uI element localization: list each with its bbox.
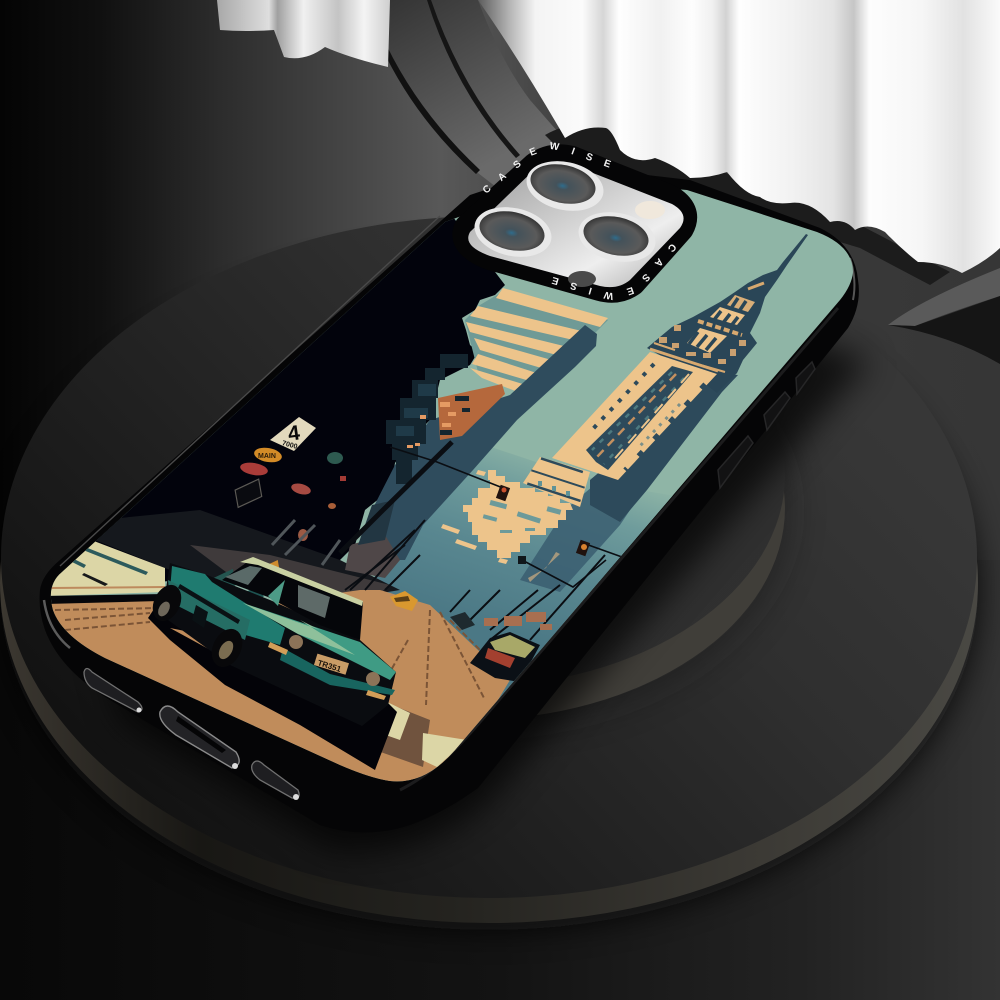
license plate: TR351 bbox=[317, 658, 343, 674]
phone shadow bbox=[100, 300, 870, 851]
mid blue pixel buildings bbox=[386, 354, 468, 484]
sky bbox=[40, 170, 870, 800]
large disc bbox=[0, 216, 978, 930]
road markings bbox=[55, 608, 510, 705]
curtain right bbox=[478, 0, 1000, 273]
dark blue building bbox=[372, 325, 597, 560]
left strip windows bbox=[590, 364, 654, 432]
road bbox=[52, 590, 510, 782]
right strip windows bbox=[625, 384, 705, 470]
dark city silhouette bbox=[40, 200, 505, 590]
camera island bbox=[456, 142, 698, 303]
license plate bbox=[314, 654, 349, 675]
sign 4: 4 bbox=[287, 421, 302, 446]
dark road band bbox=[95, 510, 400, 600]
right sidewalk patches bbox=[382, 702, 464, 767]
camera glass plate bbox=[468, 162, 684, 287]
left sidewalk bbox=[45, 538, 165, 605]
car rear body bbox=[157, 563, 396, 726]
curtain shadow scallops bbox=[545, 124, 950, 285]
tower central windows bbox=[586, 366, 693, 470]
sign 4: 7000 bbox=[281, 440, 298, 451]
tower crown details bbox=[687, 295, 755, 353]
taxi bbox=[390, 591, 418, 611]
small curtain left bbox=[217, 0, 390, 67]
car hood bbox=[243, 603, 396, 680]
right car bbox=[470, 632, 540, 682]
corner stand right bbox=[888, 268, 1000, 364]
car headlights bbox=[289, 635, 303, 649]
orange sign: MAIN bbox=[258, 453, 276, 460]
tower base bbox=[523, 457, 590, 507]
lower beige pixel blocks bbox=[441, 470, 573, 582]
screen artwork: pixel city bbox=[40, 170, 870, 800]
small disc bbox=[538, 492, 786, 714]
brand text: CASEWISE bbox=[552, 244, 676, 300]
traffic lights bbox=[496, 485, 590, 564]
car roof and cabin bbox=[222, 558, 363, 640]
green car bbox=[147, 557, 397, 770]
side buttons bbox=[718, 362, 815, 488]
phone case body bbox=[40, 165, 859, 832]
tower crown bbox=[647, 234, 808, 375]
stripe building bbox=[465, 288, 608, 396]
tower bbox=[520, 234, 808, 592]
tower shaft bbox=[552, 352, 717, 480]
arch stand behind phone bbox=[363, 0, 565, 190]
poles and wires bbox=[340, 442, 622, 640]
distant reddish buildings bbox=[484, 612, 552, 630]
car side bbox=[170, 566, 285, 645]
tower shade bbox=[590, 373, 738, 522]
distant car bbox=[450, 612, 475, 630]
street signs bbox=[213, 417, 346, 608]
street buildings at left bbox=[345, 500, 400, 578]
lower fog bbox=[374, 448, 673, 702]
car shadow bbox=[148, 600, 397, 770]
orange sign bbox=[254, 448, 282, 462]
orange building bbox=[407, 384, 505, 448]
brand text bbox=[483, 142, 676, 300]
lenses bbox=[470, 154, 665, 287]
charging and speaker ports bbox=[84, 668, 299, 800]
sign 4 bbox=[270, 417, 316, 451]
camera bumper bbox=[466, 158, 683, 289]
car wheels bbox=[147, 580, 187, 626]
tower lower column bbox=[520, 488, 630, 592]
brand text: CASEWISE bbox=[483, 142, 612, 192]
